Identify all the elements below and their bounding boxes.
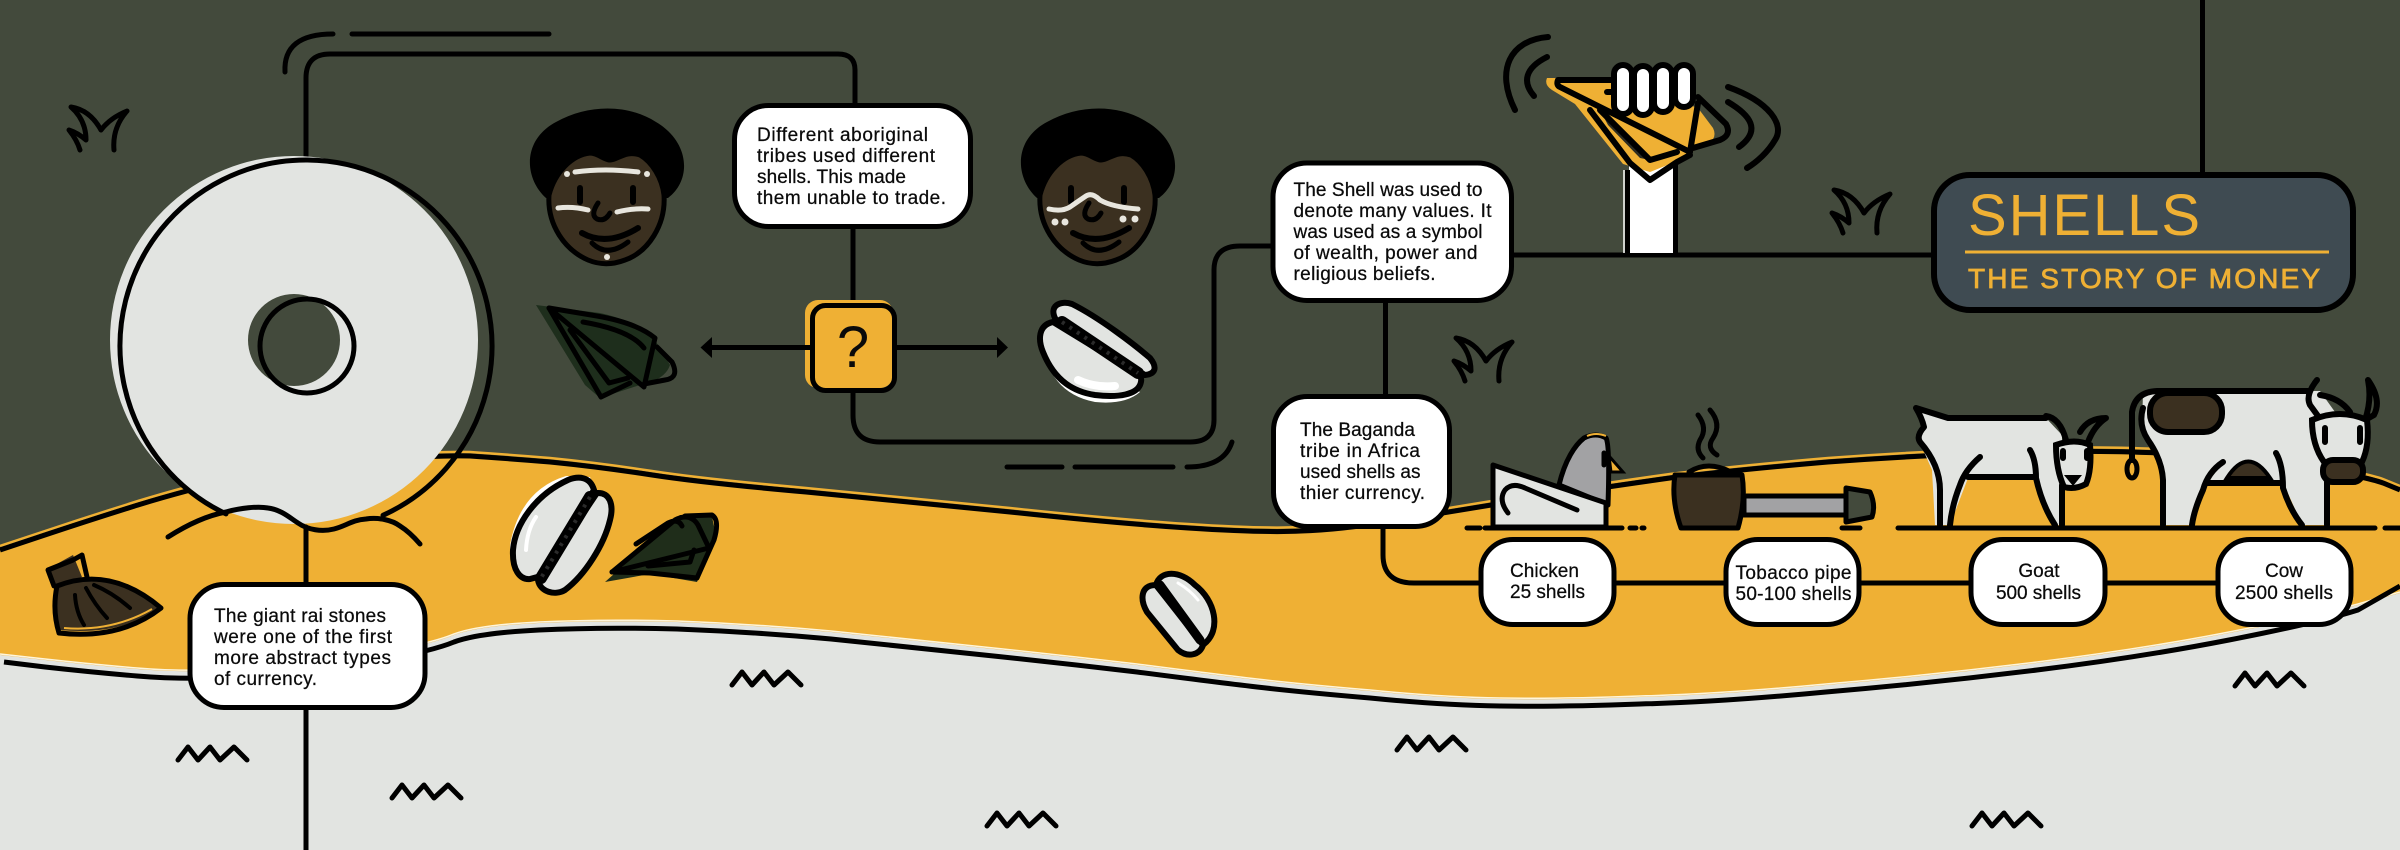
callout: Baganda tribe: used shells as	[1300, 462, 1420, 483]
callout: Baganda tribe: tribe in Africa	[1300, 441, 1420, 462]
callout: rai stones	[190, 584, 425, 708]
label: tobacco pipe price: 50-100 shells	[1736, 584, 1852, 605]
label: tobacco pipe price: Tobacco pipe	[1736, 563, 1852, 584]
rai stone disc	[110, 156, 492, 544]
icon: hand holding shell	[1506, 37, 1778, 255]
callout: different shells: shells. This made	[757, 167, 906, 188]
arrow: left to green shell	[700, 337, 810, 358]
title panel: THE STORY OF MONEY	[1968, 263, 2320, 294]
connector lines	[306, 0, 2216, 850]
callout: Baganda tribe: thier currency.	[1300, 483, 1425, 504]
callout: rai stones: of currency.	[214, 669, 317, 690]
label: cow price	[2218, 540, 2351, 624]
callout: different shells	[734, 106, 970, 226]
title panel	[1934, 175, 2353, 310]
label: goat price: 500 shells	[1996, 583, 2081, 604]
callout: shell values: religious beliefs.	[1294, 264, 1436, 285]
callout: shell values: denote many values. It	[1294, 201, 1492, 222]
arrow: right to white cowrie	[897, 337, 1008, 358]
icon: fan shell	[46, 555, 161, 634]
label: chicken price	[1481, 540, 1614, 624]
label: goat price	[1971, 540, 2105, 624]
question mark box	[805, 300, 894, 390]
callout: rai stones: more abstract types	[214, 648, 391, 669]
icon: white cowrie shell	[1040, 303, 1155, 403]
question mark box: ?	[837, 315, 869, 380]
label: chicken price: 25 shells	[1510, 582, 1585, 603]
callout: shell values: The Shell was used to	[1294, 180, 1482, 201]
icon: cow	[2127, 380, 2377, 525]
icon: dark green shell	[536, 305, 675, 398]
label: cow price: 2500 shells	[2235, 583, 2333, 604]
ground lines under goods	[1467, 526, 2400, 530]
decorative dashed lines	[285, 34, 1232, 467]
callout: rai stones: The giant rai stones	[214, 606, 386, 627]
callout: shell values: was used as a symbol	[1292, 222, 1482, 243]
face: tribe member one	[530, 108, 684, 264]
callout: different shells: tribes used different	[757, 146, 936, 167]
icon: dark green shell on sand	[605, 515, 717, 582]
callout: rai stones: were one of the first	[213, 627, 393, 648]
callout: shell values	[1273, 163, 1512, 300]
label: chicken price: Chicken	[1510, 561, 1579, 582]
icon: small cowrie shell	[1143, 574, 1214, 655]
light grey foreground	[0, 586, 2400, 850]
grey ground zig-zag marks	[178, 672, 2304, 826]
icon: tobacco pipe	[1674, 410, 1874, 528]
callout: Baganda tribe: The Baganda	[1300, 420, 1415, 441]
label: goat price: Goat	[2018, 561, 2060, 582]
callout: Baganda tribe	[1274, 396, 1450, 526]
yellow sand band	[0, 447, 2400, 850]
callout: different shells: them unable to trade.	[757, 188, 946, 209]
title panel: SHELLS	[1968, 183, 2200, 248]
callout: different shells: Different aboriginal	[757, 125, 928, 146]
icon: cowrie shell on sand	[510, 476, 611, 593]
grass tufts	[69, 107, 1890, 381]
callout: shell values: of wealth, power and	[1294, 243, 1478, 264]
icon: chicken	[1493, 434, 1623, 527]
label: tobacco pipe price	[1726, 540, 1859, 624]
label: cow price: Cow	[2265, 561, 2303, 582]
face: tribe member two	[1021, 108, 1175, 264]
icon: goat	[1915, 407, 2106, 525]
